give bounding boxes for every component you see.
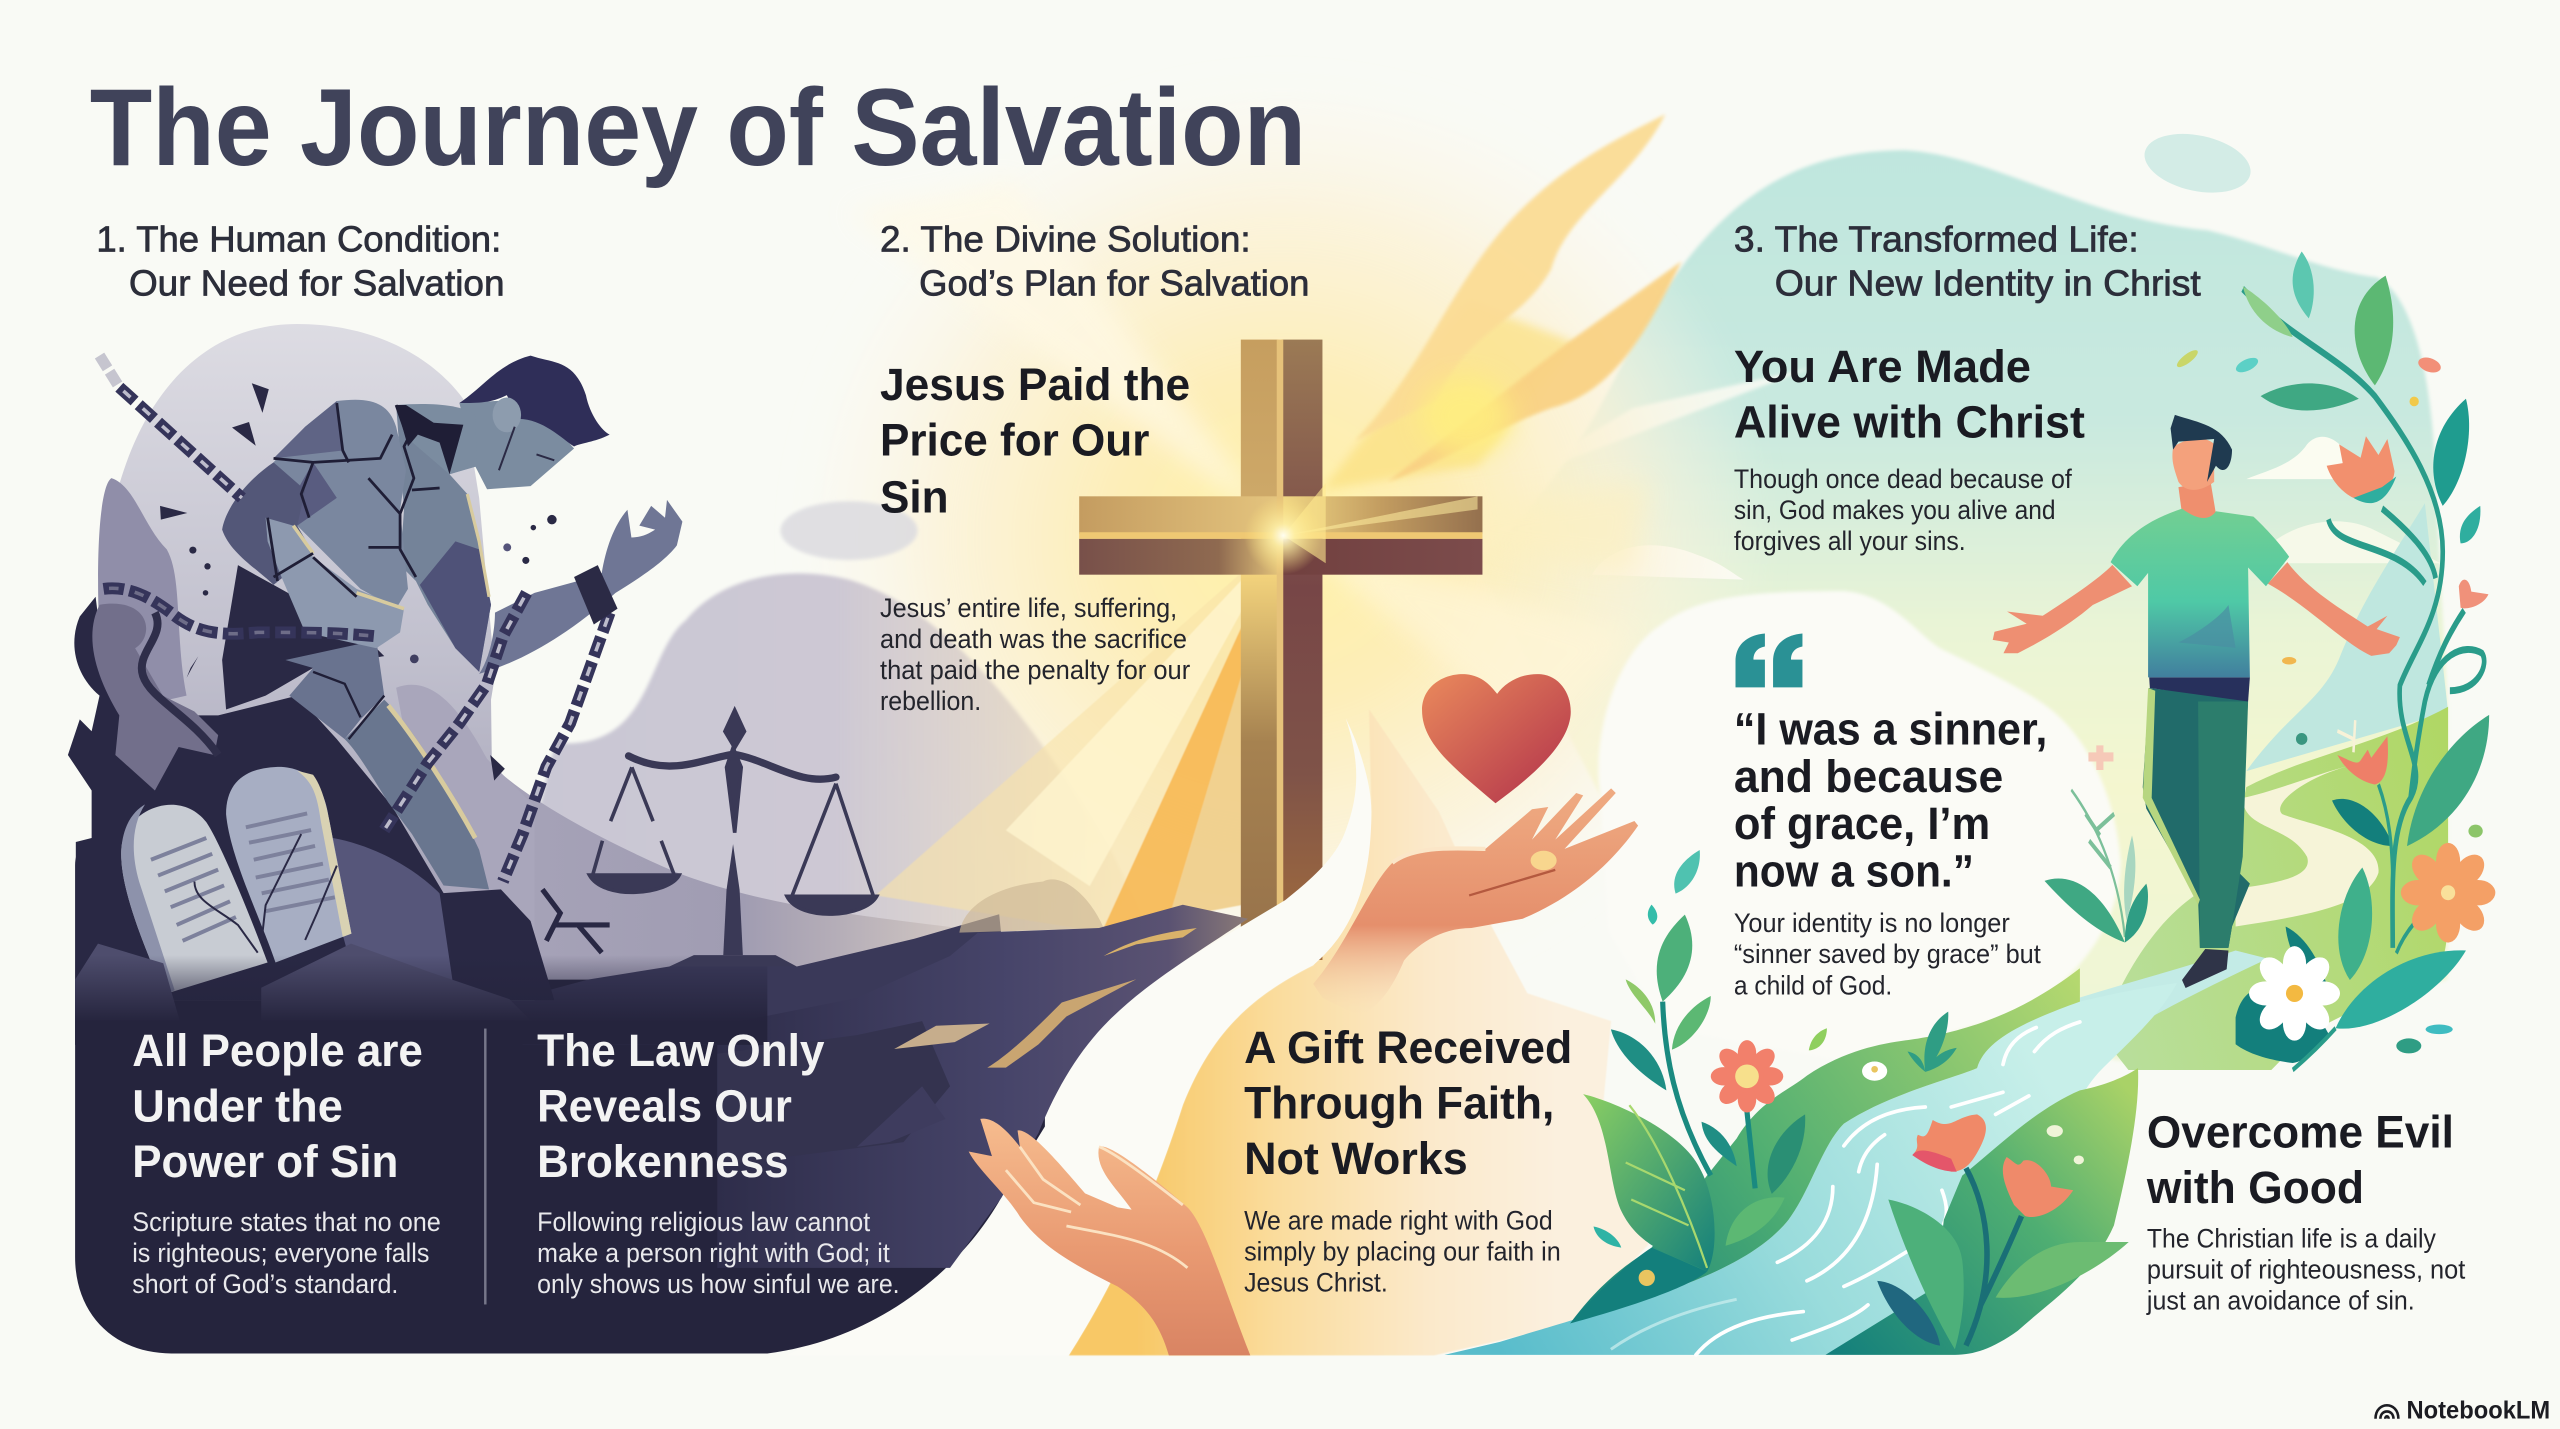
small floating petals xyxy=(2176,347,2199,370)
text block: quote: “sinner saved by grace” but xyxy=(1734,939,2041,969)
body cracks xyxy=(268,403,440,597)
text block: made alive: Alive with Christ xyxy=(1734,397,2085,448)
section heading 1 xyxy=(96,218,504,304)
text block: gift through faith: Not Works xyxy=(1244,1133,1468,1184)
cloud xyxy=(2246,437,2389,479)
text block: overcome evil: Overcome Evil xyxy=(2147,1107,2454,1158)
text block: overcome evil: The Christian life is a daily xyxy=(2147,1223,2437,1253)
chest left xyxy=(274,400,408,609)
text block: Jesus paid the price: that paid the penalty for our xyxy=(880,655,1190,685)
text block: made alive: sin, God makes you alive and xyxy=(1734,495,2056,525)
scene: broken figure in chains xyxy=(68,324,682,1000)
river top xyxy=(1978,951,2268,1070)
text block: overcome evil: just an avoidance of sin. xyxy=(2146,1285,2415,1315)
shirt xyxy=(2111,509,2289,677)
vine leaves xyxy=(2293,251,2314,318)
pink sparkle xyxy=(2088,745,2113,770)
text block: made alive xyxy=(1734,341,2085,556)
tablet lines xyxy=(151,813,335,941)
text block: the law: Reveals Our xyxy=(537,1081,792,1132)
pants xyxy=(2143,688,2250,948)
scene: man on path with vine xyxy=(1978,251,2495,1070)
text block: the law xyxy=(537,1025,900,1299)
icon: quotation mark xyxy=(1736,633,1802,687)
neck xyxy=(2178,482,2216,520)
hair xyxy=(2171,415,2232,482)
scattered leaves and bud xyxy=(1648,905,1657,925)
hip xyxy=(285,640,384,739)
dead branch xyxy=(542,889,610,953)
text block: all people under sin: Scripture states that no one xyxy=(132,1207,441,1237)
section heading 2: God’s Plan for Salvation xyxy=(919,263,1309,304)
shards and dust xyxy=(160,383,505,781)
right tablet xyxy=(226,767,351,963)
hair xyxy=(459,356,610,447)
cross xyxy=(1079,340,1482,960)
tulips xyxy=(2327,436,2395,498)
text block: Jesus paid the price: Sin xyxy=(880,472,949,523)
text block: quote: of grace, I’m xyxy=(1734,798,1990,849)
tablet cracks xyxy=(194,834,337,953)
text block: Jesus paid the price: rebellion. xyxy=(880,686,981,716)
text block: quote: Your identity is no longer xyxy=(1734,908,2010,938)
green bank xyxy=(1570,968,2080,1323)
lower plant base xyxy=(2236,987,2328,1063)
tulip one xyxy=(1912,1114,1986,1172)
text block: gift through faith: simply by placing our faith in xyxy=(1244,1236,1561,1266)
text block: all people under sin: Power of Sin xyxy=(132,1136,398,1187)
lower right bank xyxy=(1825,1068,2138,1355)
panel: rocks fading into card xyxy=(75,944,767,1045)
right arm xyxy=(2268,562,2400,656)
text block: made alive: Though once dead because of xyxy=(1734,464,2072,494)
text block: gift through faith: Through Faith, xyxy=(1244,1077,1554,1128)
card body xyxy=(75,842,1045,1353)
panel: quote cloud xyxy=(1598,591,2121,1061)
right rock fading xyxy=(717,879,1248,1268)
tulip two xyxy=(2003,1157,2073,1217)
vine stems xyxy=(2243,289,2484,948)
white ribbon xyxy=(787,719,1371,1355)
big leaf xyxy=(1583,1094,1715,1272)
head and neck xyxy=(459,399,574,489)
panel: transformed life teal sky xyxy=(1478,125,2447,1061)
midground rocks xyxy=(509,914,1012,1045)
chain waist xyxy=(103,588,376,636)
green hill xyxy=(2100,707,2448,1070)
panel: human condition lilac hills xyxy=(389,501,1176,1020)
streaks xyxy=(1696,1022,2080,1355)
dots xyxy=(2047,1125,2063,1137)
chain mid xyxy=(384,593,527,830)
river xyxy=(1444,983,2177,1355)
text block: Jesus paid the price xyxy=(880,359,1190,716)
text block: gift through faith: We are made right with God xyxy=(1244,1205,1553,1235)
section heading 1: Our Need for Salvation xyxy=(129,263,504,304)
chest right xyxy=(396,405,491,672)
winding path xyxy=(2236,766,2379,926)
waist xyxy=(2149,677,2250,701)
section heading 3 xyxy=(1734,218,2201,304)
section heading 3: 3. The Transformed Life: xyxy=(1734,218,2139,259)
scene: river, bank and foreground plants xyxy=(1444,850,2177,1355)
stems xyxy=(1663,1002,1755,1188)
left arm xyxy=(1993,565,2132,653)
section heading 2: 2. The Divine Solution: xyxy=(880,218,1251,259)
orange flower xyxy=(2401,843,2495,943)
red flower xyxy=(1711,1040,1783,1113)
white flower xyxy=(2249,946,2340,1041)
text block: quote xyxy=(1734,703,2047,1000)
forearm across body xyxy=(266,518,404,648)
text block: overcome evil: pursuit of righteousness, not xyxy=(2147,1254,2466,1284)
thigh xyxy=(345,700,489,889)
icon: heart xyxy=(1422,674,1571,803)
rock beside tablets xyxy=(333,838,503,1000)
text block: the law: make a person right with God; it xyxy=(537,1238,890,1268)
far arm and hand xyxy=(479,500,682,674)
dark rock mass xyxy=(68,597,455,1000)
man xyxy=(1993,415,2400,988)
wrist chain xyxy=(503,613,610,881)
NotebookLM logo: NotebookLM xyxy=(2407,1397,2550,1425)
tulip leaves xyxy=(1888,1199,1964,1349)
text block: Jesus paid the price: Price for Our xyxy=(880,415,1150,466)
text block: quote: “I was a sinner, xyxy=(1734,703,2047,754)
text block: the law: Brokenness xyxy=(537,1136,789,1187)
text block: overcome evil xyxy=(2146,1107,2466,1315)
title: The Journey of Salvation xyxy=(90,67,1306,189)
sprout xyxy=(1908,1012,1957,1072)
fern xyxy=(2045,790,2148,943)
text block: Jesus paid the price: Jesus Paid the xyxy=(880,359,1190,410)
lilac dome xyxy=(100,324,495,1000)
card divider xyxy=(484,1029,487,1304)
text block: Jesus paid the price: and death was the sacrifice xyxy=(880,624,1187,654)
section heading 2 xyxy=(880,218,1309,304)
dark base xyxy=(1570,1248,1707,1323)
text block: all people under sin: is righteous; everyone falls xyxy=(132,1238,429,1268)
text block: all people under sin xyxy=(132,1025,441,1299)
upright leaves xyxy=(1657,915,1692,1002)
icon: balance scales xyxy=(589,710,877,967)
panel: rays over hills xyxy=(876,536,1283,933)
face xyxy=(2172,439,2214,490)
section heading 3: Our New Identity in Christ xyxy=(1775,263,2201,304)
grainy rock band xyxy=(92,604,218,791)
wrist cuff xyxy=(574,565,618,624)
text block: all people under sin: short of God’s standard. xyxy=(132,1269,398,1299)
text block: gift through faith: Jesus Christ. xyxy=(1244,1267,1388,1297)
text block: quote: now a son.” xyxy=(1734,846,1974,897)
left tablet xyxy=(121,805,268,994)
panel: gift yellow region xyxy=(1069,709,1648,1355)
section heading 1: 1. The Human Condition: xyxy=(96,218,501,259)
chain top xyxy=(100,356,119,387)
text block: overcome evil: with Good xyxy=(2146,1162,2364,1213)
text block: the law: The Law Only xyxy=(537,1025,825,1076)
chain tail xyxy=(142,613,218,755)
tulip stems xyxy=(1966,1168,2021,1346)
lilac ridge right of leg xyxy=(396,685,535,1000)
mountain xyxy=(2246,503,2448,771)
panel: dark card with rocks xyxy=(75,842,1248,1353)
text block: all people under sin: All People are xyxy=(132,1025,423,1076)
left arm xyxy=(222,462,313,585)
text block: made alive: You Are Made xyxy=(1734,341,2031,392)
panel: central yellow glow and rays xyxy=(792,73,1771,1004)
text block: quote: a child of God. xyxy=(1734,970,1892,1000)
text block: gift through faith: A Gift Received xyxy=(1244,1022,1572,1073)
text block: the law: Following religious law cannot xyxy=(537,1207,871,1237)
text block: Jesus paid the price: Jesus’ entire life, suffering, xyxy=(880,593,1177,623)
text block: gift through faith xyxy=(1244,1022,1572,1297)
icon: lower receiving hand xyxy=(969,1119,1250,1355)
text block: quote: and because xyxy=(1734,751,2003,802)
text block: the law: only shows us how sinful we are. xyxy=(537,1269,900,1299)
under-torso shadow xyxy=(222,565,384,709)
shoe xyxy=(2182,949,2228,988)
icon: upper giving hand xyxy=(1313,788,1638,1016)
text block: made alive: forgives all your sins. xyxy=(1734,526,1966,556)
text block: all people under sin: Under the xyxy=(132,1081,343,1132)
